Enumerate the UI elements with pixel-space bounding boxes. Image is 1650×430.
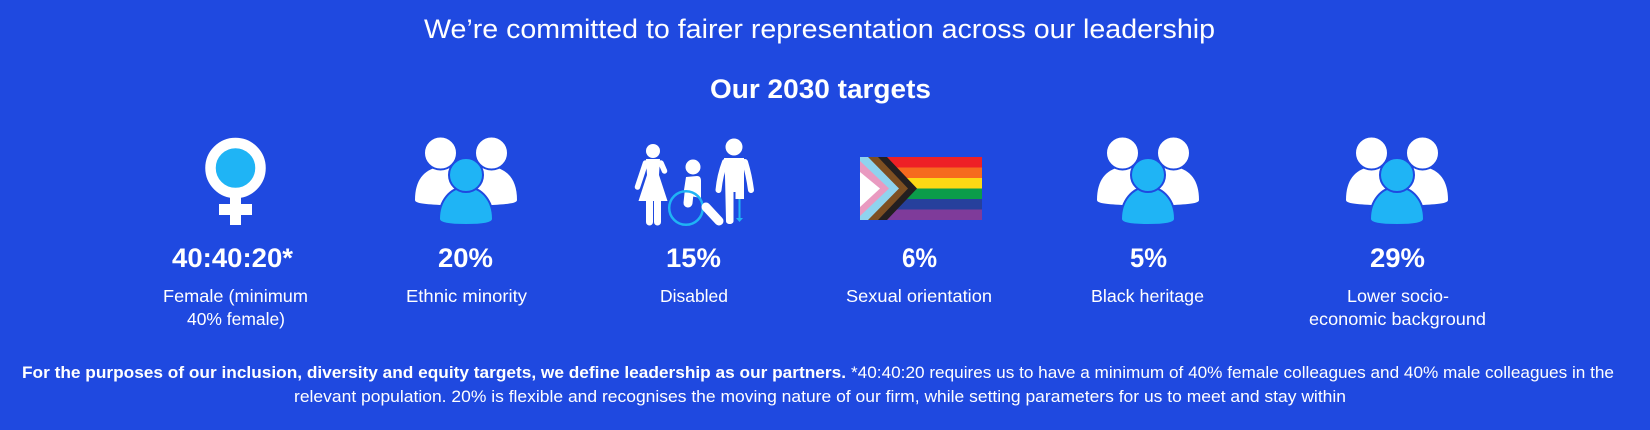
target: sexual orientation <box>846 157 992 306</box>
icon: people group <box>1346 136 1448 225</box>
icon: people group <box>415 136 517 225</box>
label: Disabled <box>660 286 728 306</box>
woman <box>638 144 668 222</box>
footnote: relevant population. 20% is flexible and recognises the moving nature of our firm, while setting parameters for us to meet and stay within <box>294 387 1346 406</box>
value: 15% <box>666 243 721 273</box>
value: 29% <box>1370 243 1425 273</box>
value: 40:40:20* <box>172 243 294 273</box>
icon: progress pride flag <box>860 157 982 220</box>
label: Black heritage <box>1091 286 1204 306</box>
value: 20% <box>438 243 493 273</box>
footnote: For the purposes of our inclusion, diversity and equity targets, we define leadership as our partners. <box>22 363 846 382</box>
man with prosthetic leg <box>718 138 751 224</box>
label: 40% female) <box>187 309 285 329</box>
label: Lower socio- <box>1347 286 1449 306</box>
title: We’re committed to fairer representation across our leadership <box>424 14 1215 44</box>
icon: female symbol <box>210 143 260 225</box>
target: ethnic minority <box>406 136 527 306</box>
wheelchair user <box>669 160 719 225</box>
value: 5% <box>1130 243 1167 273</box>
label <box>1309 286 1486 329</box>
value: 6% <box>902 243 937 273</box>
label: Ethnic minority <box>406 286 527 306</box>
target: black heritage <box>1091 136 1204 306</box>
label: Female (minimum <box>163 286 308 306</box>
label <box>163 286 308 329</box>
label: Sexual orientation <box>846 286 992 306</box>
target: lower socio-economic background <box>1309 136 1486 329</box>
footnote: *40:40:20 requires us to have a minimum of 40% female colleagues and 40% male colleagues in the <box>851 363 1614 382</box>
icon: disabled people <box>638 138 751 225</box>
heading: our 2030 targets: Our 2030 targets <box>710 74 931 104</box>
icon: people group <box>1097 136 1199 225</box>
target: disabled <box>638 138 751 306</box>
footnote <box>22 363 1614 406</box>
target: female <box>163 143 308 329</box>
label: economic background <box>1309 309 1486 329</box>
